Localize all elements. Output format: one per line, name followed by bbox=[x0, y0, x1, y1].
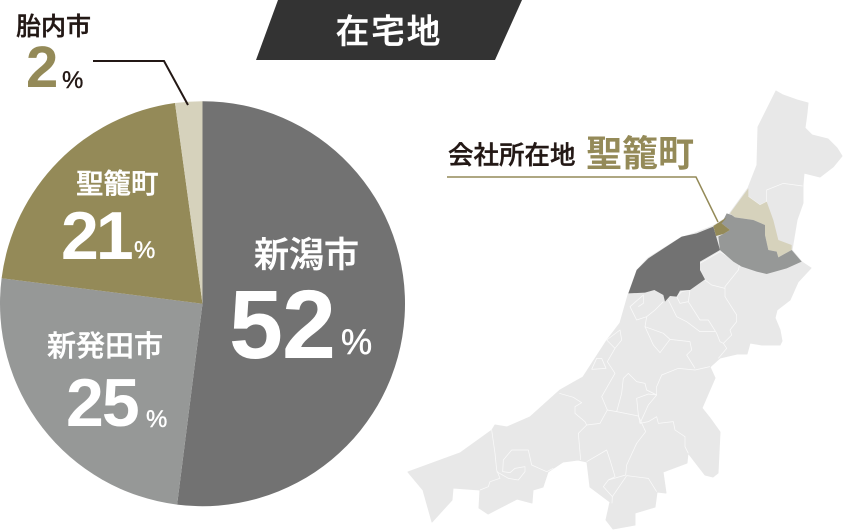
label: 新発田市 25%: % bbox=[146, 406, 167, 433]
callout: 会社所在地 聖籠町: 聖籠町 bbox=[586, 125, 694, 177]
label: 新発田市 25%: 新発田市 bbox=[47, 323, 163, 365]
callout: 会社所在地 聖籠町 bbox=[447, 125, 718, 222]
label: 新潟市 52% bbox=[229, 227, 372, 379]
label: 新発田市 25% bbox=[47, 323, 167, 441]
map of Niigata bbox=[408, 91, 842, 529]
label: 胎内市 2%: 2 bbox=[26, 35, 58, 100]
map: prefecture base bbox=[408, 91, 842, 529]
callout: 会社所在地 聖籠町: 会社所在地 bbox=[448, 135, 576, 172]
map: municipal borders central bbox=[630, 252, 740, 368]
map: municipal borders south bbox=[480, 330, 710, 503]
label: 聖籠町 21%: 聖籠町 bbox=[76, 161, 158, 201]
label: 胎内市 2% bbox=[16, 7, 91, 100]
slice: 胎内市 2% bbox=[175, 101, 202, 304]
label: 新発田市 25%: 25 bbox=[66, 365, 138, 441]
map: 新発田市 bbox=[718, 213, 802, 274]
slice: 新発田市 25% bbox=[0, 278, 203, 505]
title banner bbox=[256, 0, 522, 60]
label: 新潟市 52%: 新潟市 bbox=[254, 227, 359, 278]
title banner: 在宅地 bbox=[336, 4, 442, 53]
label: 聖籠町 21%: 21 bbox=[61, 198, 132, 274]
label: 聖籠町 21%: % bbox=[134, 237, 155, 264]
map: 胎内市 bbox=[730, 188, 792, 257]
pie chart bbox=[0, 101, 405, 506]
map: 新潟市 bbox=[628, 227, 720, 302]
label: 胎内市 2%: 胎内市 bbox=[16, 7, 91, 43]
slice: 新潟市 52% bbox=[177, 101, 405, 506]
map: municipal borders north bbox=[748, 183, 803, 205]
map: 聖籠町 bbox=[713, 217, 730, 236]
label: 新潟市 52%: % bbox=[341, 323, 372, 362]
label: 胎内市 2%: % bbox=[62, 67, 83, 94]
label: 新潟市 52%: 52 bbox=[229, 270, 335, 379]
leader line: 胎内市 bbox=[93, 61, 188, 105]
label: 聖籠町 21% bbox=[61, 161, 158, 274]
slice: 聖籠町 21% bbox=[2, 103, 202, 304]
